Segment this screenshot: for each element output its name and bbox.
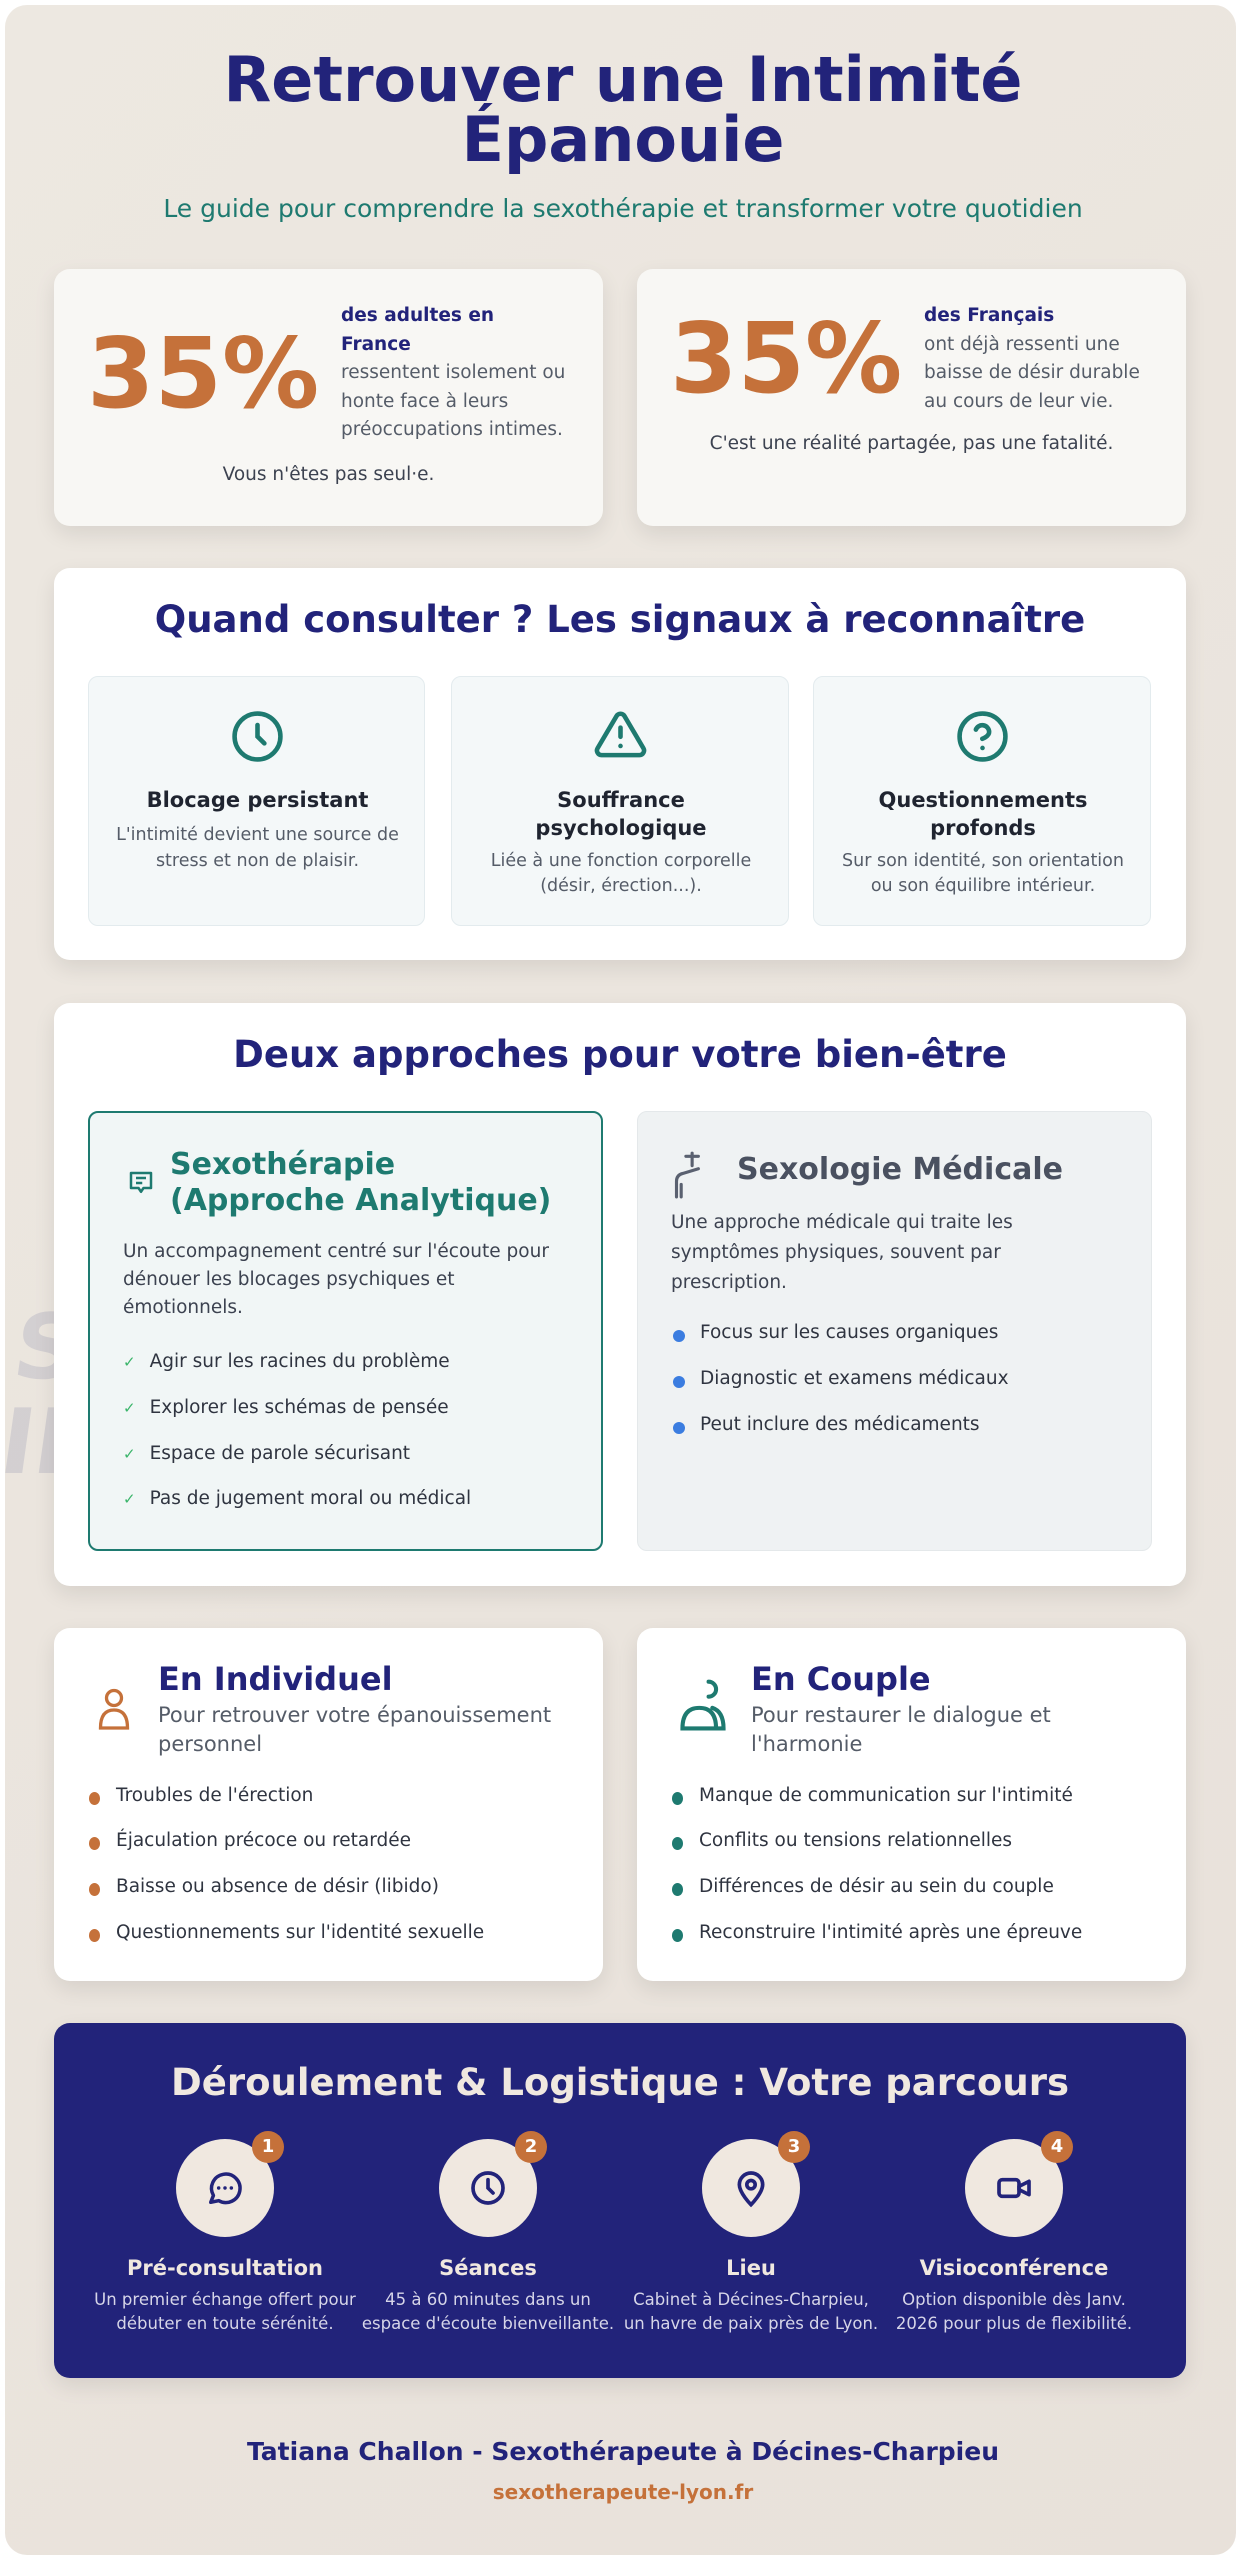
bullet list: Questionnements sur l'identité sexuelle — [116, 1922, 484, 1943]
icon: question — [957, 711, 1008, 762]
bullet list: Conflits ou tensions relationnelles — [699, 1830, 1012, 1851]
desc: L'intimité devient une source de — [116, 825, 399, 845]
checklist — [123, 1351, 471, 1509]
stat card 1 — [54, 269, 603, 526]
bullet list — [672, 1785, 1082, 1943]
desc: Un accompagnement centré sur l'écoute pour dénouer les blocages psychiques et émotionnels. — [123, 1241, 549, 1318]
bullet list — [673, 1322, 1009, 1435]
icon: warning — [594, 712, 646, 758]
icon: couple — [680, 1680, 726, 1730]
step desc: Un premier échange offert pour — [94, 2290, 356, 2309]
title: (Approche Analytique) — [170, 1183, 551, 1218]
watermark text: SEXO — [7, 1295, 291, 1400]
title: Sexologie Médicale — [737, 1152, 1063, 1187]
step desc: espace d'écoute bienveillante. — [362, 2314, 614, 2333]
step title: Pré-consultation — [127, 2256, 323, 2280]
stat text: des Français — [924, 305, 1054, 326]
box: sexotherapie — [88, 1111, 603, 1551]
title: Retrouver une Intimité — [224, 43, 1022, 116]
step desc — [896, 2290, 1132, 2333]
desc: Liée à une fonction corporelle — [491, 851, 751, 871]
title: En Individuel — [158, 1660, 393, 1698]
big number: 35% — [87, 317, 319, 430]
icon: clock — [232, 711, 283, 762]
stat text — [341, 305, 565, 440]
icon: person — [98, 1688, 130, 1730]
heading: Déroulement & Logistique : Votre parcours — [171, 2061, 1069, 2104]
badge 4: 4 — [1051, 2136, 1063, 2157]
title: psychologique — [535, 816, 707, 840]
bullet list: Peut inclure des médicaments — [700, 1414, 980, 1435]
title: Sexothérapie — [170, 1147, 395, 1182]
title: profonds — [930, 816, 1036, 840]
desc — [116, 825, 399, 871]
step 3 — [624, 2131, 878, 2333]
checklist: ✓ Explorer les schémas de pensée — [123, 1397, 449, 1418]
step desc: 2026 pour plus de flexibilité. — [896, 2314, 1132, 2333]
icon: medical — [674, 1152, 700, 1198]
checklist: ✓ Pas de jugement moral ou médical — [123, 1488, 471, 1509]
signal card 3 — [813, 676, 1151, 926]
desc: Sur son identité, son orientation — [842, 851, 1124, 871]
checklist: ✓ Espace de parole sécurisant — [123, 1443, 410, 1464]
watermark text — [0, 1295, 291, 1495]
stat text: des adultes en — [341, 305, 494, 326]
badge 4 — [1041, 2131, 1073, 2163]
step desc: débuter en toute sérénité. — [116, 2314, 334, 2333]
panel: logistics — [54, 2023, 1186, 2378]
badge 2: 2 — [525, 2136, 537, 2157]
step desc — [94, 2290, 356, 2333]
icon circle: video — [965, 2139, 1063, 2237]
desc: (désir, érection...). — [540, 876, 702, 896]
bullet list: Reconstruire l'intimité après une épreuve — [699, 1922, 1082, 1943]
watermark text: INTI — [0, 1390, 212, 1495]
stat note: Vous n'êtes pas seul·e. — [223, 464, 434, 485]
checklist: ✓ Agir sur les racines du problème — [123, 1351, 450, 1372]
subtitle: Le guide pour comprendre la sexothérapie et transformer votre quotidien — [163, 194, 1083, 223]
title: Blocage persistant — [147, 788, 368, 812]
step 1 — [94, 2131, 356, 2333]
badge 3: 3 — [788, 2136, 800, 2157]
heading: Quand consulter ? Les signaux à reconnaître — [155, 598, 1085, 641]
step desc: Option disponible dès Janv. — [902, 2290, 1126, 2309]
title — [170, 1147, 551, 1218]
step title: Lieu — [726, 2256, 776, 2280]
subtitle: Pour restaurer le dialogue et l'harmonie — [751, 1703, 1051, 1756]
step title: Visioconférence — [920, 2256, 1108, 2280]
icon circle: chat — [176, 2139, 274, 2237]
heading: Deux approches pour votre bien-être — [233, 1033, 1007, 1076]
badge 3 — [778, 2131, 810, 2163]
subtitle: Pour retrouver votre épanouissement personnel — [158, 1703, 551, 1756]
big number: 35% — [670, 302, 902, 415]
stat card 2 — [637, 269, 1186, 526]
stat text: ont déjà ressenti une baisse de désir durable au cours de leur vie. — [924, 334, 1140, 412]
desc: Une approche médicale qui traite les symptômes physiques, souvent par prescription. — [671, 1212, 1013, 1293]
icon: chat — [130, 1172, 152, 1194]
step title: Séances — [439, 2256, 537, 2280]
desc: stress et non de plaisir. — [156, 851, 359, 871]
step desc — [362, 2290, 614, 2333]
bullet list: Diagnostic et examens médicaux — [700, 1368, 1009, 1389]
bullet list: Éjaculation précoce ou retardée — [116, 1830, 411, 1851]
panel: signals — [54, 568, 1186, 960]
icon circle: pin — [702, 2139, 800, 2237]
bullet list: Baisse ou absence de désir (libido) — [116, 1876, 439, 1897]
step 2 — [362, 2131, 614, 2333]
footer name: Tatiana Challon - Sexothérapeute à Décines-Charpieu — [247, 2437, 999, 2466]
title: En Couple — [751, 1660, 931, 1698]
box: sexologie medicale — [637, 1111, 1152, 1551]
bullet list: Différences de désir au sein du couple — [699, 1876, 1054, 1897]
signal card 1 — [88, 676, 425, 926]
bullet list: Manque de communication sur l'intimité — [699, 1785, 1073, 1806]
badge 1 — [252, 2131, 284, 2163]
card: individuel — [54, 1628, 603, 1981]
title — [535, 788, 707, 840]
title — [879, 788, 1087, 840]
footer url: sexotherapeute-lyon.fr — [493, 2480, 753, 2504]
bullet list: Focus sur les causes organiques — [700, 1322, 998, 1343]
icon circle: clock — [439, 2139, 537, 2237]
step desc: Cabinet à Décines-Charpieu, — [633, 2290, 869, 2309]
badge 1: 1 — [262, 2136, 274, 2157]
desc — [491, 851, 751, 896]
step desc: 45 à 60 minutes dans un — [385, 2290, 591, 2309]
stat text: France — [341, 334, 411, 355]
bullet list: Troubles de l'érection — [116, 1785, 313, 1806]
stat note: C'est une réalité partagée, pas une fatalité. — [710, 433, 1113, 454]
card: couple — [637, 1628, 1186, 1981]
title: Souffrance — [557, 788, 685, 812]
step desc: un havre de paix près de Lyon. — [624, 2314, 878, 2333]
desc — [842, 851, 1124, 896]
signal card 2 — [451, 676, 789, 926]
step 4 — [896, 2131, 1132, 2333]
title: Épanouie — [462, 103, 784, 176]
desc: ou son équilibre intérieur. — [871, 876, 1095, 896]
step desc — [624, 2290, 878, 2333]
bullet list — [89, 1785, 484, 1943]
badge 2 — [515, 2131, 547, 2163]
stat text: ressentent isolement ou honte face à leurs préoccupations intimes. — [341, 362, 565, 440]
panel: approaches — [54, 1003, 1186, 1586]
title: Questionnements — [879, 788, 1087, 812]
title — [224, 43, 1022, 176]
